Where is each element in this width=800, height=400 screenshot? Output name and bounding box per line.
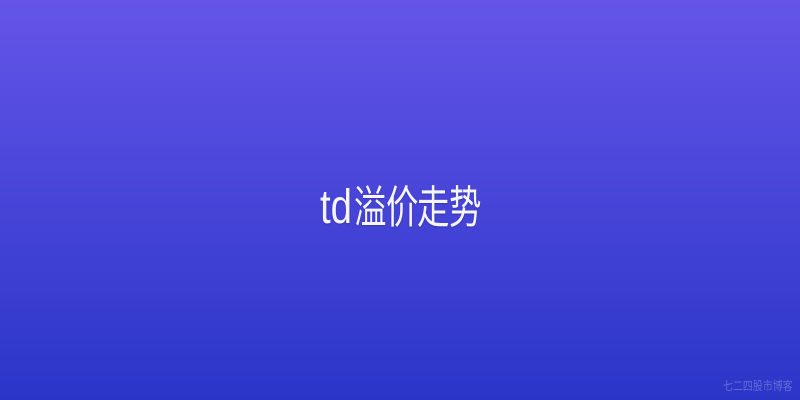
title: 走 xyxy=(417,182,449,233)
title: 价 xyxy=(386,182,418,233)
title: td xyxy=(320,181,352,234)
title: 势 xyxy=(449,182,481,233)
watermark: 七二四股市博客 xyxy=(723,379,793,393)
title: 溢 xyxy=(354,182,386,233)
title xyxy=(320,181,481,234)
